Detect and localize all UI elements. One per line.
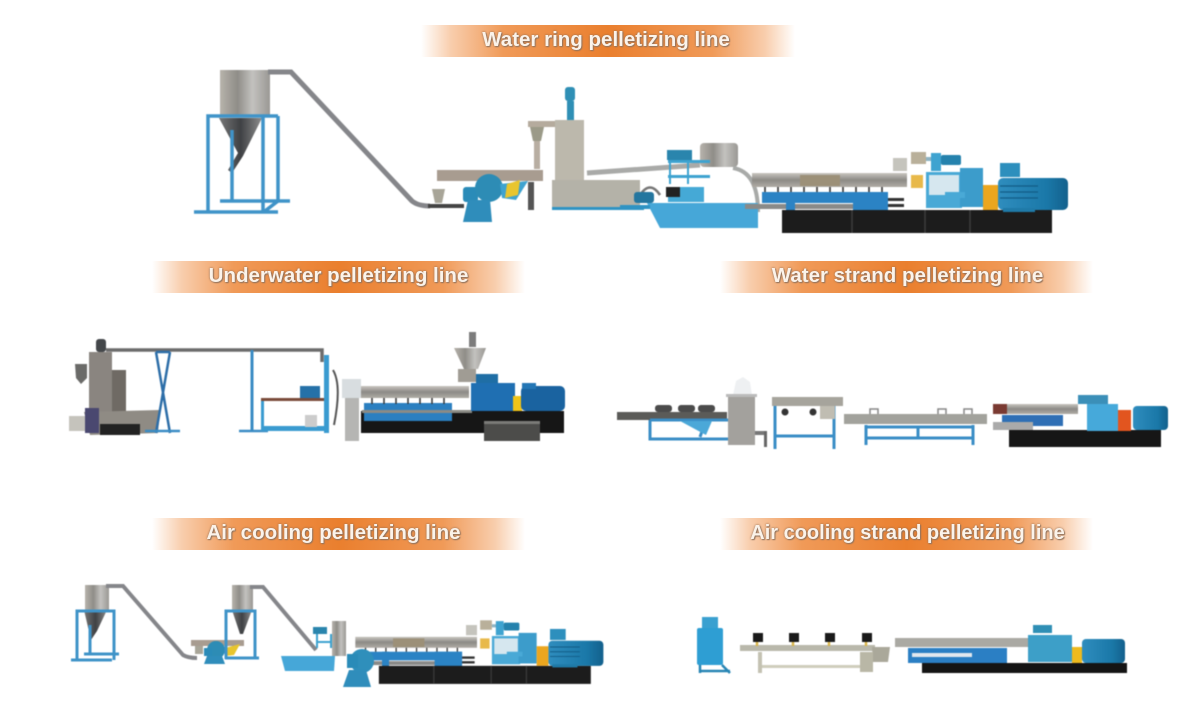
extruder <box>993 395 1168 447</box>
air conveyor <box>740 633 890 673</box>
strand die conveyor <box>617 405 730 439</box>
heading: Underwater pelletizing line: Underwater pelletizing line <box>209 264 468 287</box>
machine line: air cooling pelletizing <box>71 585 603 687</box>
heading: Water ring pelletizing line: Water ring pelletizing line <box>482 28 730 51</box>
vibrating screen <box>772 397 843 449</box>
pelletizer <box>281 621 346 671</box>
extruder with hopper <box>361 332 565 441</box>
collection tank <box>726 377 767 447</box>
heading: Air cooling strand pelletizing line <box>720 518 1093 550</box>
heading: Air cooling strand pelletizing line: Air cooling strand pelletizing line <box>750 522 1065 544</box>
second hopper with stand <box>225 585 259 659</box>
dryer tower and water tank <box>69 339 160 435</box>
control panel <box>342 379 361 441</box>
water tank <box>844 409 987 445</box>
blue collection unit <box>697 617 730 673</box>
dewatering unit <box>528 87 644 210</box>
heading: Air cooling pelletizing line: Air cooling pelletizing line <box>206 521 460 544</box>
heading: Water strand pelletizing line: Water strand pelletizing line <box>772 264 1043 287</box>
pipe and pelletizer <box>587 143 758 228</box>
conveying pipe <box>268 72 430 206</box>
blower <box>343 649 374 687</box>
machine line: air cooling strand pelletizing <box>697 617 1127 673</box>
heading: Water ring pelletizing line <box>421 25 795 57</box>
overhead pipe and stands <box>106 350 322 433</box>
pelletizer frame <box>261 355 338 433</box>
heading: Underwater pelletizing line <box>152 261 525 293</box>
machine line: water strand pelletizing <box>617 377 1168 449</box>
feeder and blower <box>191 640 244 664</box>
first hopper with stand <box>71 585 119 660</box>
feeder and blower <box>428 170 543 222</box>
twin-screw extruder <box>745 152 1068 233</box>
first conveying pipe <box>106 586 197 658</box>
feed hopper with stand <box>194 70 290 212</box>
extruder <box>895 625 1127 673</box>
second conveying pipe <box>250 587 316 650</box>
machine line: underwater pelletizing <box>69 332 565 441</box>
heading: Air cooling pelletizing line <box>152 518 525 550</box>
heading: Water strand pelletizing line <box>720 261 1093 293</box>
extruder <box>350 620 603 684</box>
machine line: water ring pelletizing <box>194 70 1068 233</box>
